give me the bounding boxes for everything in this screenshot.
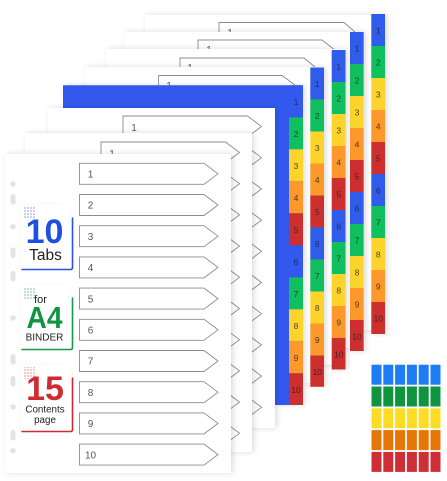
blue divider sheet with tabs: 9 bbox=[294, 353, 299, 363]
blue divider sheet with tabs: 5 bbox=[294, 225, 299, 235]
divider sheet 7 with tabs: 1 bbox=[206, 45, 212, 56]
divider sheet 7 with tabs: 1 bbox=[355, 44, 360, 54]
colored sticker sheet bbox=[370, 363, 442, 473]
badge: 15 Contents page: 15 bbox=[26, 370, 64, 408]
blue divider sheet with tabs: 6 bbox=[294, 257, 299, 267]
divider sheet 6 with tabs: 1 bbox=[336, 62, 341, 72]
index tabs 1 to 10: 2 bbox=[88, 201, 94, 212]
divider sheet 5 with tabs: 4 bbox=[315, 175, 320, 185]
divider sheet 5 with tabs: 1 bbox=[315, 79, 320, 89]
blue divider sheet with tabs: 7 bbox=[294, 289, 299, 299]
blue sticker row bbox=[372, 365, 440, 385]
divider sheet 5 with tabs: 1 bbox=[166, 81, 172, 92]
index tabs 1 to 10: 8 bbox=[88, 388, 94, 399]
index tabs 1 to 10: 3 bbox=[88, 232, 94, 243]
divider sheet 6 with tabs bbox=[106, 49, 346, 370]
badge: for A4 binder bbox=[21, 285, 73, 350]
index sheet 2 bbox=[25, 133, 252, 452]
badge: 15 Contents page: page bbox=[34, 415, 56, 426]
badge: 15 Contents page: Contents bbox=[25, 404, 65, 416]
divider sheet 5 with tabs: 10 bbox=[313, 367, 322, 377]
blue divider sheet with tabs: 3 bbox=[294, 161, 299, 171]
divider sheet 5 with tabs: 7 bbox=[315, 271, 320, 281]
divider sheet 7 with tabs: 7 bbox=[355, 236, 360, 246]
divider sheet 6 with tabs: 8 bbox=[336, 286, 341, 296]
badge: 10 Tabs: 10 bbox=[26, 213, 63, 251]
badge: 10 Tabs: Tabs bbox=[29, 247, 62, 264]
front index sheet bbox=[5, 154, 231, 473]
divider sheet 5 with tabs bbox=[84, 67, 324, 387]
divider sheet 6 with tabs: 7 bbox=[336, 254, 341, 264]
index tabs 1 to 10 bbox=[80, 163, 218, 465]
binder holes bbox=[10, 181, 16, 453]
badge: for A4 binder: A4 bbox=[26, 300, 63, 335]
green sticker row bbox=[372, 386, 440, 406]
divider sheet 7 with tabs bbox=[124, 32, 364, 351]
divider sheet 6 with tabs: 9 bbox=[336, 318, 341, 328]
blue divider sheet with tabs bbox=[63, 85, 303, 405]
orange sticker row bbox=[372, 430, 440, 450]
blue divider sheet with tabs: 8 bbox=[294, 321, 299, 331]
index tabs 1 to 10: 7 bbox=[88, 357, 94, 368]
index tabs 1 to 10: 5 bbox=[88, 294, 94, 305]
divider sheet 8 (back) with tabs bbox=[145, 14, 385, 334]
divider sheet 6 with tabs: 6 bbox=[336, 222, 341, 232]
index tabs 1 to 10: 10 bbox=[85, 450, 96, 461]
index tabs 1 to 10: 9 bbox=[88, 419, 94, 430]
blue divider sheet with tabs: 1 bbox=[294, 97, 299, 107]
divider sheet 8 (back) with tabs: 3 bbox=[376, 90, 381, 100]
divider sheet 6 with tabs: 10 bbox=[334, 350, 344, 360]
red sticker row bbox=[372, 452, 440, 472]
divider sheet 7 with tabs: 4 bbox=[355, 140, 360, 150]
index tabs 1 to 10: 1 bbox=[88, 170, 94, 180]
divider sheet 8 (back) with tabs: 1 bbox=[376, 26, 381, 36]
blue divider sheet with tabs: 4 bbox=[294, 193, 299, 203]
divider sheet 6 with tabs: 4 bbox=[336, 158, 341, 168]
divider sheet 8 (back) with tabs: 10 bbox=[374, 314, 383, 324]
badge: 15 Contents page bbox=[21, 364, 73, 432]
divider sheet 8 (back) with tabs: 7 bbox=[376, 218, 381, 228]
divider sheet 7 with tabs: 10 bbox=[352, 332, 362, 342]
divider sheet 5 with tabs: 9 bbox=[315, 335, 320, 345]
blue divider sheet with tabs: 10 bbox=[291, 385, 301, 395]
divider sheet 8 (back) with tabs: 9 bbox=[376, 282, 381, 292]
divider sheet 5 with tabs: 3 bbox=[315, 143, 320, 153]
index sheet 2: 1 bbox=[109, 149, 115, 160]
divider sheet 7 with tabs: 5 bbox=[355, 172, 360, 182]
blue divider sheet with tabs: 2 bbox=[294, 129, 299, 139]
divider sheet 5 with tabs: 5 bbox=[315, 207, 320, 217]
badge: for A4 binder: for bbox=[34, 294, 47, 306]
divider sheet 5 with tabs: 2 bbox=[315, 111, 320, 121]
divider sheet 8 (back) with tabs: 6 bbox=[376, 186, 381, 196]
divider sheet 6 with tabs: 1 bbox=[187, 63, 193, 74]
divider sheet 6 with tabs: 2 bbox=[336, 94, 341, 104]
index sheet 3 bbox=[48, 108, 275, 428]
divider sheet 8 (back) with tabs: 8 bbox=[376, 250, 381, 260]
divider sheet 7 with tabs: 8 bbox=[355, 268, 360, 278]
divider sheet 8 (back) with tabs: 4 bbox=[376, 122, 381, 132]
divider sheet 8 (back) with tabs: 2 bbox=[376, 58, 381, 68]
badge: 10 Tabs bbox=[21, 204, 73, 270]
yellow sticker row bbox=[372, 408, 440, 428]
divider sheet 7 with tabs: 3 bbox=[355, 108, 360, 118]
badge: for A4 binder: BINDER bbox=[26, 332, 63, 344]
divider sheet 7 with tabs: 6 bbox=[355, 204, 360, 214]
divider sheet 6 with tabs: 5 bbox=[336, 190, 341, 200]
divider sheet 5 with tabs: 8 bbox=[315, 303, 320, 313]
divider sheet 5 with tabs: 6 bbox=[315, 239, 320, 249]
index tabs 1 to 10: 4 bbox=[88, 263, 94, 274]
divider sheet 8 (back) with tabs: 1 bbox=[227, 28, 233, 39]
divider sheet 7 with tabs: 9 bbox=[355, 300, 360, 310]
divider sheet 7 with tabs: 2 bbox=[355, 76, 360, 86]
divider sheet 8 (back) with tabs: 5 bbox=[376, 154, 381, 164]
index tabs 1 to 10: 6 bbox=[88, 326, 94, 336]
index sheet 3: 1 bbox=[131, 123, 137, 134]
divider sheet 6 with tabs: 3 bbox=[336, 126, 341, 136]
